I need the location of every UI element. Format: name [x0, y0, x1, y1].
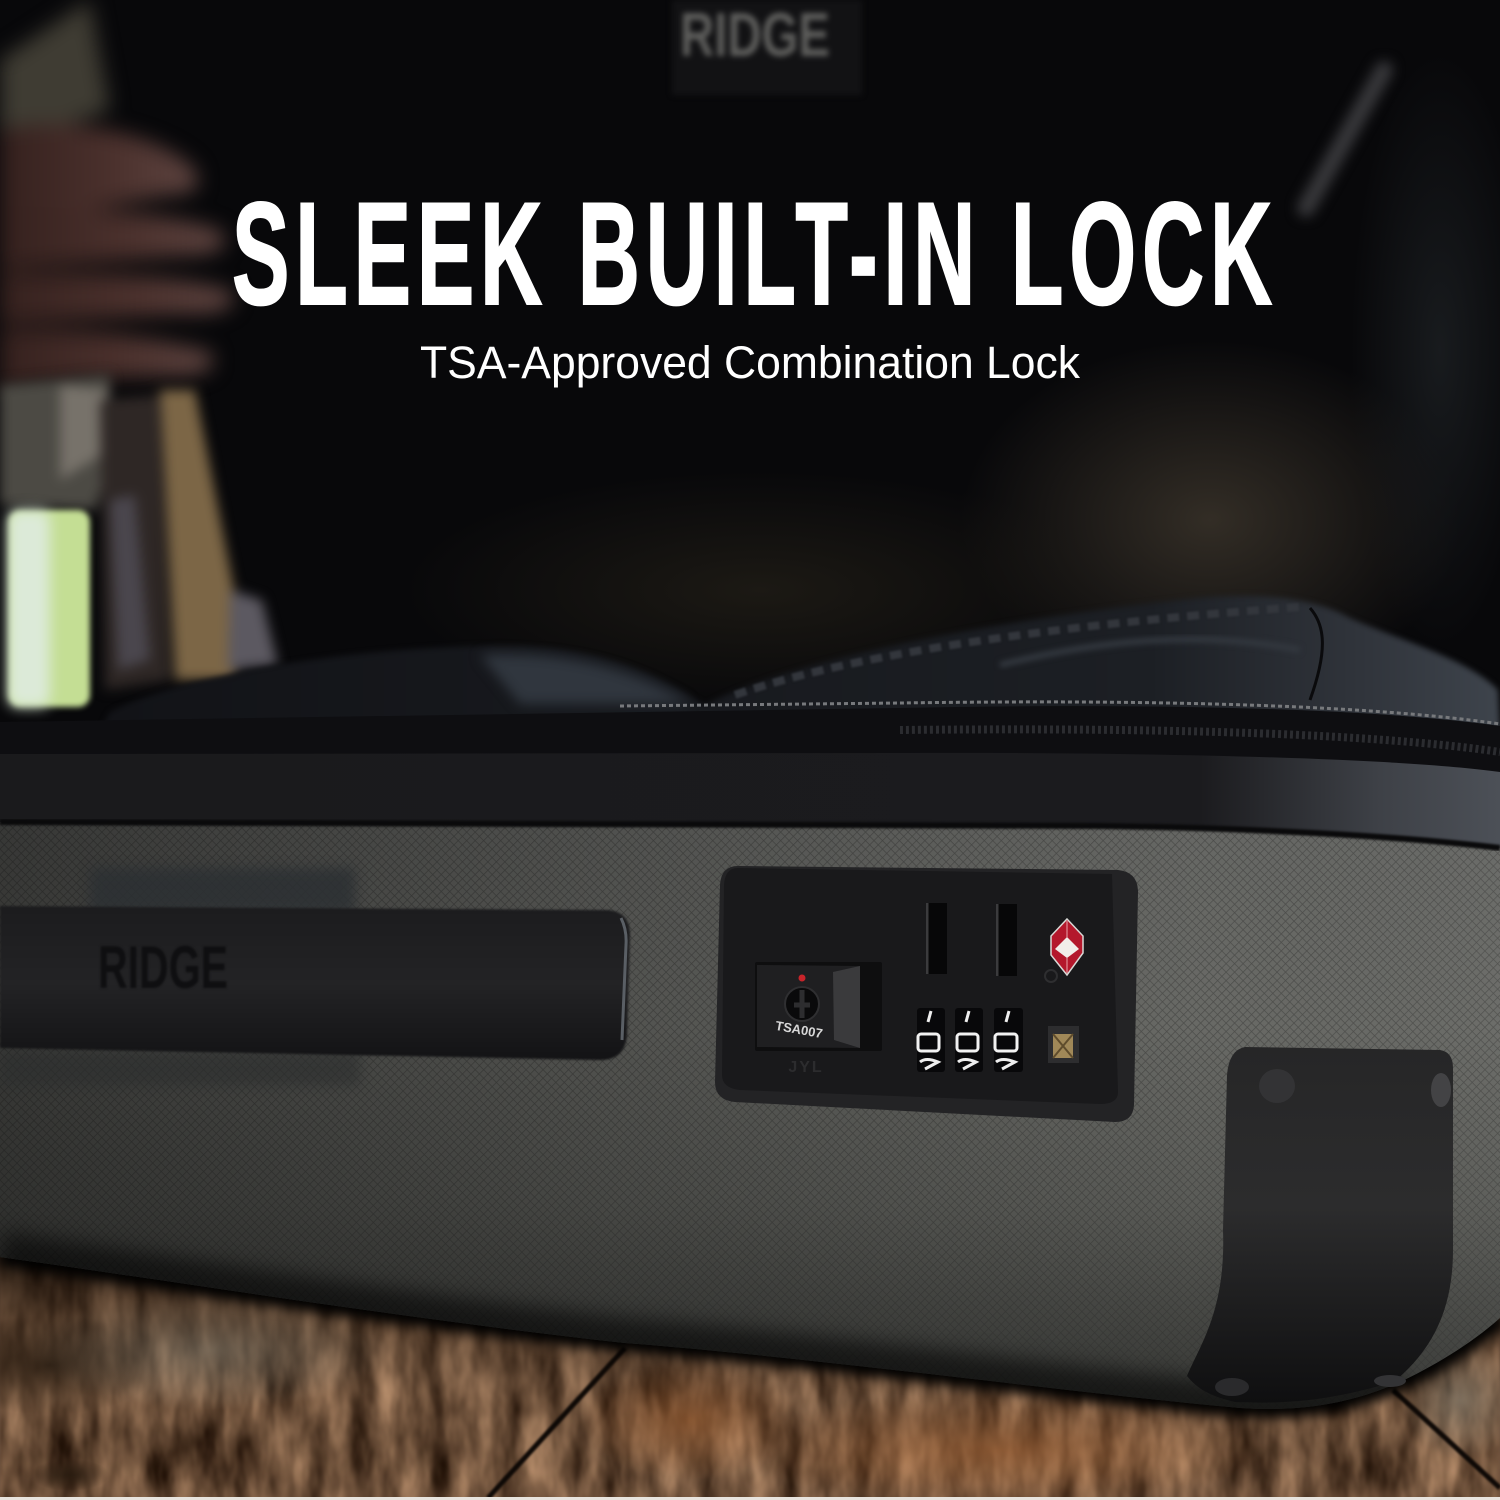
title: SLEEK BUILT-IN LOCK [232, 172, 1272, 336]
release slots [926, 903, 1017, 976]
combination wheels [917, 1008, 1023, 1072]
combination lock panel [715, 866, 1138, 1122]
subtitle: TSA-Approved Combination Lock [420, 337, 1080, 388]
wheel two [955, 1008, 983, 1072]
blurred olive shirt area [400, 50, 1500, 710]
zipper band [0, 706, 1500, 772]
suitcase body [0, 820, 1500, 1420]
luggage handle [0, 906, 630, 1060]
floor plank seams [488, 1348, 1500, 1498]
packing cubes inside suitcase [100, 596, 1500, 730]
brass reset button [1048, 1026, 1079, 1063]
lock code label: TSA007 [774, 1018, 824, 1041]
corner guard [1187, 1047, 1453, 1403]
wood floor [0, 1240, 1500, 1500]
icon: TSA red diamond [1045, 919, 1083, 982]
lock maker mark: JYL [788, 1059, 824, 1076]
blurred shirt logo [672, 0, 862, 95]
blurred camouflage fabric [0, 375, 278, 690]
blurred zipper pull [1306, 70, 1384, 208]
suitcase lid rim and zipper [0, 702, 1500, 848]
corner rivets [1215, 1069, 1451, 1396]
blurred shirt logo: RIDGE [680, 1, 830, 70]
wheel three [994, 1008, 1023, 1072]
handle logo: RIDGE [98, 934, 228, 1001]
blurred bright green object [8, 510, 90, 707]
blurred person's hand [0, 0, 233, 390]
key lock module [755, 962, 882, 1051]
wheel one [917, 1008, 945, 1072]
